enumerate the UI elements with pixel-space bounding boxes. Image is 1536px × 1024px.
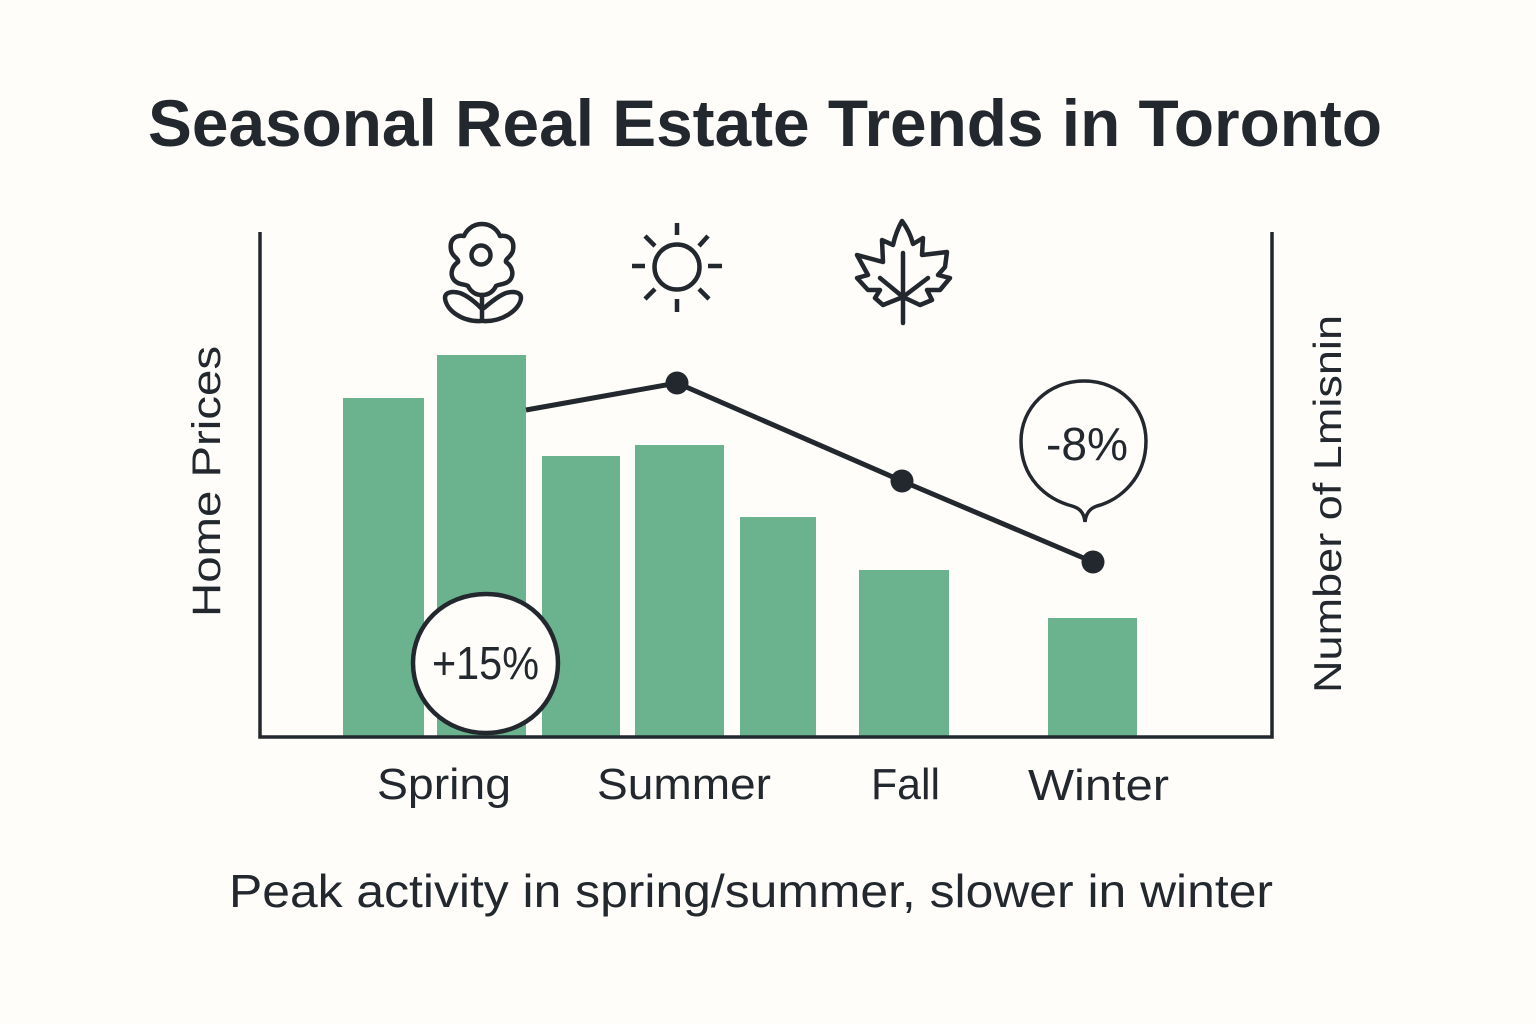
caption: Peak activity in spring/summer, slower in winter — [229, 865, 1273, 917]
callout: +15% — [413, 594, 558, 733]
season labels: Winter — [1028, 761, 1169, 810]
trend line — [526, 372, 1104, 574]
title: Seasonal Real Estate Trends in Toronto — [148, 86, 1382, 160]
season labels: Spring — [377, 760, 511, 809]
callout: +15%: +15% — [432, 637, 539, 689]
icon: flower — [445, 224, 521, 321]
season labels — [377, 760, 1169, 810]
callout: -8%: -8% — [1046, 418, 1128, 470]
bar chart — [343, 355, 1137, 736]
chart axes — [260, 232, 1272, 737]
callout: -8% — [1021, 381, 1146, 522]
season labels: Summer — [597, 760, 771, 809]
icon: sun — [632, 223, 722, 312]
right axis label: Number of Lmisnin — [1307, 315, 1350, 693]
left axis label: Home Prices — [185, 346, 229, 617]
icon: maple leaf — [857, 221, 950, 323]
season labels: Fall — [871, 760, 940, 809]
